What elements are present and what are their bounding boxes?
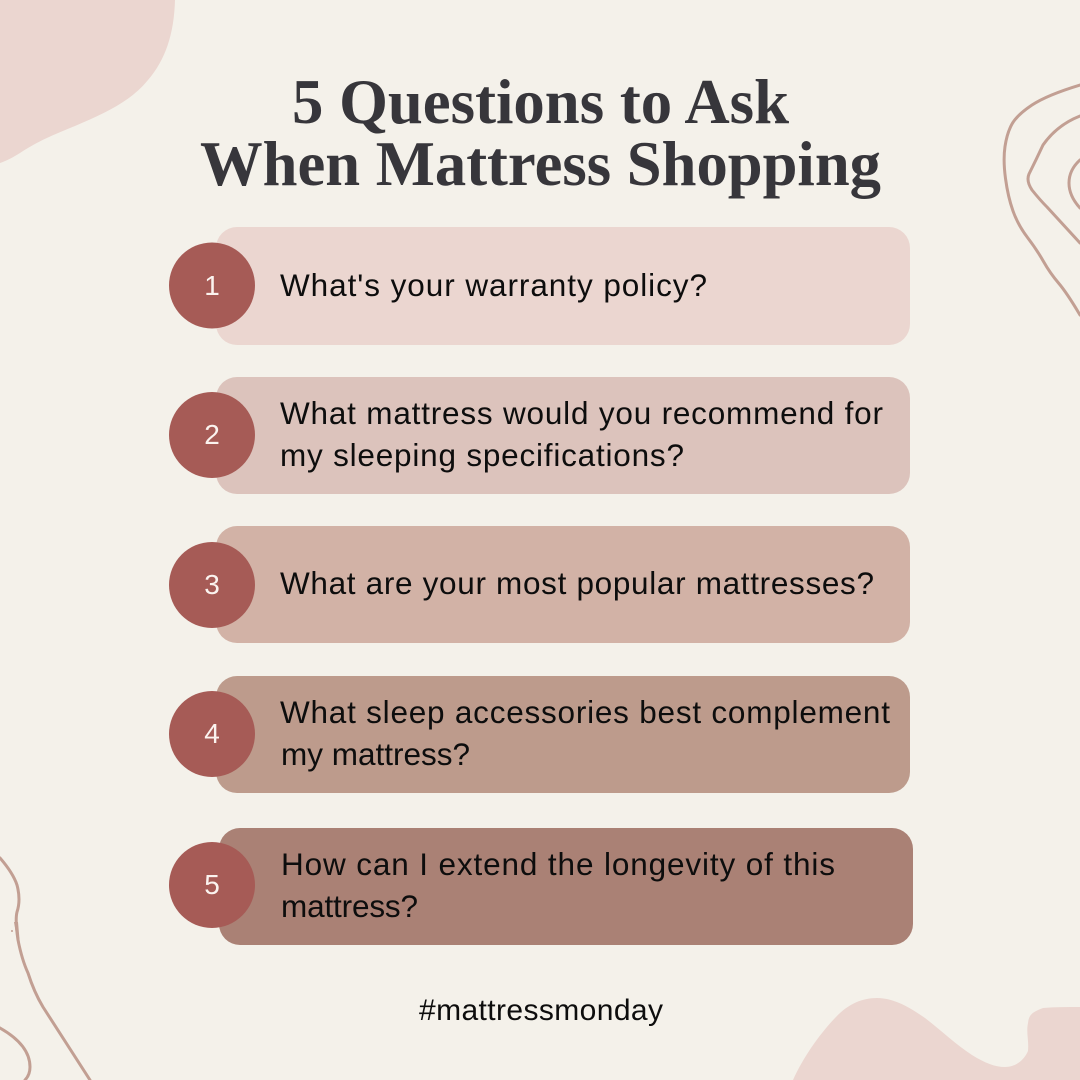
question 5 text: How can I extend the longevity of this (281, 846, 835, 882)
decoration: bottom-left contour lines (0, 858, 90, 1080)
card 4 background (216, 676, 910, 793)
question 2 text: What mattress would you recommend for (280, 395, 883, 431)
panel: question 3 (169, 526, 910, 643)
question 1 text: What's your warranty policy? (280, 267, 707, 303)
number badge 5 (169, 842, 255, 928)
number 5: 5 (204, 869, 220, 900)
number 2: 2 (204, 419, 220, 450)
panel: question 4 (169, 676, 910, 793)
panel: question 2 (169, 377, 910, 494)
panel: question 1 (169, 227, 910, 345)
card 2 background (216, 377, 910, 494)
number badge 4 (169, 691, 255, 777)
question 3 text: What are your most popular mattresses? (280, 565, 874, 601)
title: 5 Questions to Ask (292, 67, 789, 137)
decoration: top-right contour lines (1004, 85, 1080, 315)
decoration: bottom-right blob (793, 998, 1080, 1080)
number badge 2 (169, 392, 255, 478)
number 4: 4 (204, 718, 220, 749)
question 2 text: my sleeping specifications? (280, 437, 684, 473)
number badge 3 (169, 542, 255, 628)
question 4 text (280, 694, 890, 772)
number badge 1 (169, 242, 255, 328)
question 2 text (280, 395, 883, 473)
question 4 text: my mattress? (281, 736, 470, 772)
card 3 background (216, 526, 910, 643)
title: When Mattress Shopping (200, 129, 881, 199)
card 1 background (216, 227, 910, 345)
question 5 text (281, 846, 835, 924)
title (200, 67, 881, 199)
question 4 text: What sleep accessories best complement (280, 694, 890, 730)
card 5 background (219, 828, 913, 945)
number 1: 1 (204, 270, 220, 301)
decoration: top-left blob (0, 0, 175, 163)
question 5 text: mattress? (281, 888, 418, 924)
hashtag: #mattressmonday (419, 994, 663, 1027)
number 3: 3 (204, 569, 220, 600)
panel: question 5 (169, 828, 913, 945)
